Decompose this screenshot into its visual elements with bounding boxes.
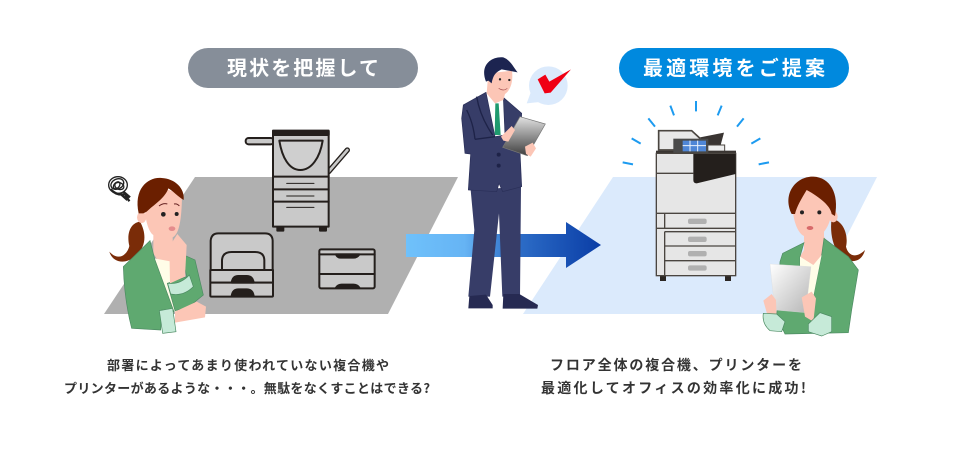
output slot bbox=[693, 154, 736, 183]
floor: light blue parallelogram bbox=[523, 177, 877, 314]
hands bbox=[501, 126, 536, 157]
caption: left: プリンターがあるような・・・。無駄をなくすことはできる? bbox=[64, 378, 430, 397]
heading pill: current state bbox=[188, 48, 418, 88]
heading pill: current state: 現状を把握して bbox=[227, 52, 379, 81]
head and neck bbox=[792, 188, 833, 267]
caption: right: フロア全体の複合機、プリンターを bbox=[550, 355, 802, 375]
hair bbox=[788, 177, 836, 216]
neck and shirt bbox=[485, 93, 503, 137]
shirt bbox=[800, 255, 822, 297]
right woman: with document bbox=[763, 177, 865, 336]
icon: shine rays bbox=[623, 101, 769, 164]
jacket details bbox=[467, 97, 500, 167]
new multifunction printer bbox=[623, 101, 769, 281]
document bbox=[770, 264, 811, 313]
hand at chin bbox=[169, 234, 187, 283]
printer: tray unit right bbox=[319, 249, 375, 288]
face details bbox=[159, 204, 179, 231]
printer feet bbox=[660, 275, 731, 281]
old equipment group bbox=[210, 131, 375, 297]
legs bbox=[468, 187, 521, 297]
jacket sleeve bbox=[167, 254, 203, 311]
hair bbox=[138, 178, 184, 213]
printer body bbox=[656, 153, 736, 276]
caption: right bbox=[541, 355, 806, 398]
jacket bbox=[462, 92, 522, 192]
businessman with tablet bbox=[462, 57, 571, 309]
tray handles bbox=[688, 219, 707, 271]
icon: worry scribble bbox=[109, 177, 130, 201]
lower hand bbox=[175, 302, 206, 323]
face details bbox=[800, 210, 821, 230]
hair bbox=[484, 57, 518, 83]
hands bbox=[763, 292, 816, 322]
copier: old large bbox=[246, 131, 347, 231]
jacket body bbox=[123, 241, 174, 330]
caption: left: 部署によってあまり使われていない複合機や bbox=[107, 355, 389, 374]
control panel bbox=[673, 139, 708, 155]
cuff upper bbox=[168, 275, 193, 295]
head and neck bbox=[145, 187, 182, 267]
speech bubble with check mark bbox=[527, 66, 571, 105]
face bbox=[487, 71, 512, 103]
caption: left bbox=[64, 355, 430, 397]
arrow bbox=[406, 222, 601, 268]
jacket bbox=[777, 238, 858, 334]
floor: grey parallelogram bbox=[104, 177, 458, 314]
caption: right: 最適化してオフィスの効率化に成功! bbox=[541, 378, 806, 398]
ponytail bbox=[831, 218, 865, 261]
scanner top bbox=[656, 131, 736, 155]
heading pill: proposal bbox=[619, 48, 849, 88]
cuffs bbox=[763, 313, 832, 336]
left woman: troubled bbox=[109, 177, 206, 333]
heading pill: proposal: 最適環境をご提案 bbox=[643, 52, 825, 81]
cuff lower bbox=[159, 308, 176, 333]
face details bbox=[499, 78, 510, 90]
tablet bbox=[503, 117, 545, 156]
shoes bbox=[468, 294, 538, 309]
printer: tray unit left bbox=[210, 233, 273, 297]
shirt bbox=[154, 258, 185, 312]
tie bbox=[495, 103, 501, 135]
ponytail bbox=[109, 222, 144, 262]
